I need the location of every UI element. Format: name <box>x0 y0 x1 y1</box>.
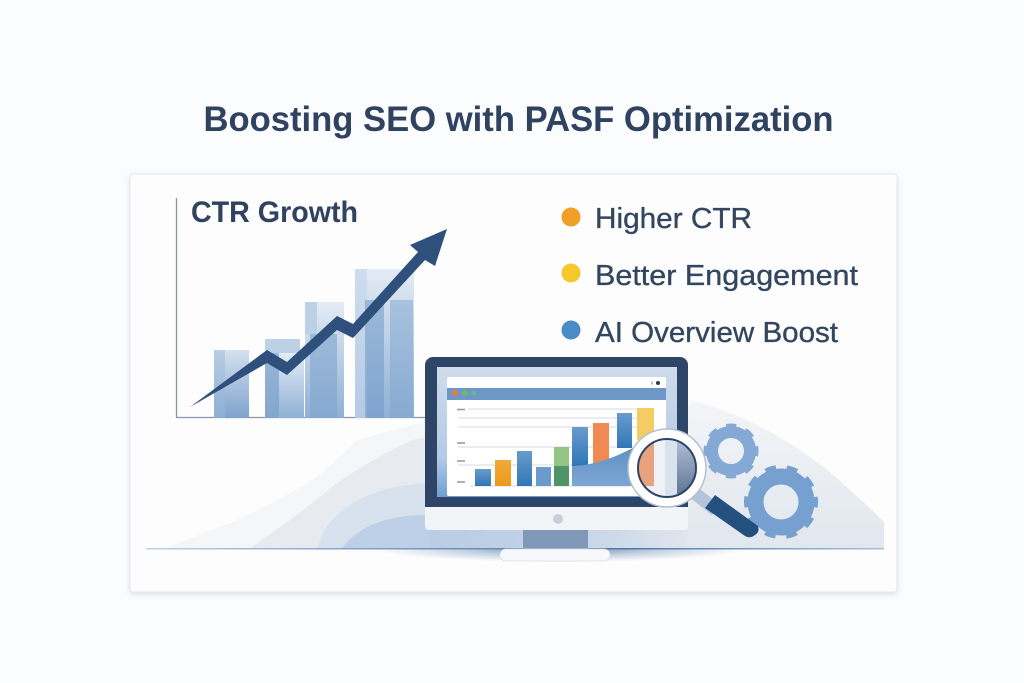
icon: small gear <box>707 427 755 475</box>
monitor screen <box>437 367 677 497</box>
icon: large gear <box>748 469 814 535</box>
browser window <box>447 377 666 496</box>
legend: AI Overview Boost: AI Overview Boost <box>595 317 838 349</box>
monitor <box>425 357 688 561</box>
chart axes <box>176 198 425 418</box>
chart: CTR growth <box>176 196 447 418</box>
window dots <box>452 390 476 396</box>
legend: Higher CTR: Higher CTR <box>595 203 752 235</box>
monitor bezel <box>425 357 688 507</box>
ground line <box>146 548 884 550</box>
icon: magnifying glass <box>628 429 759 537</box>
screen area curve <box>572 444 654 486</box>
browser toolbar <box>447 388 666 400</box>
bars <box>214 269 414 418</box>
monitor camera <box>553 514 563 524</box>
panel: main card <box>130 174 897 592</box>
magnifier neck <box>692 491 716 510</box>
title: Boosting SEO with PASF Optimization <box>204 100 834 139</box>
monitor chin <box>425 500 688 530</box>
legend <box>562 203 858 349</box>
legend: Better Engagement: Better Engagement <box>595 260 858 292</box>
chart heading: CTR Growth <box>191 196 358 229</box>
ground shadow <box>375 549 745 575</box>
chart grid <box>457 409 654 486</box>
trend arrow <box>190 229 447 407</box>
monitor base <box>500 549 610 561</box>
magnifier handle <box>705 495 759 537</box>
monitor neck <box>523 528 588 549</box>
magnifier lens <box>628 429 706 507</box>
background hills <box>167 400 884 548</box>
screen bar chart <box>475 408 654 486</box>
